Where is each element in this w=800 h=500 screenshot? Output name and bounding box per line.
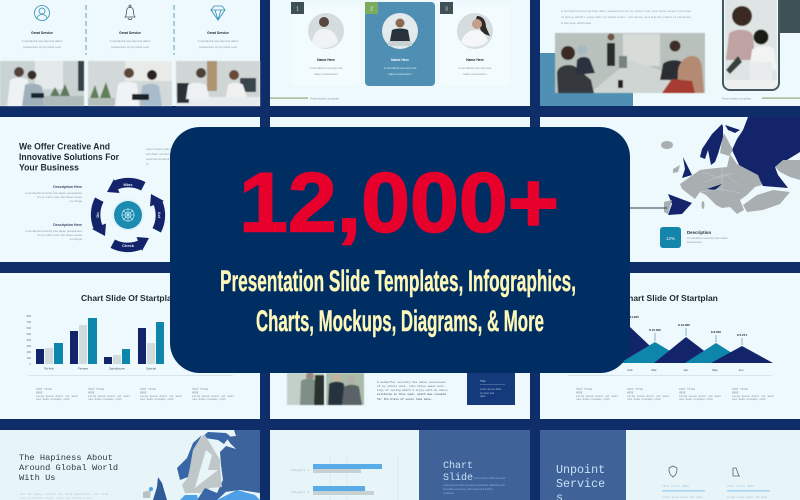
right panel: ut laoreet <box>443 491 454 495</box>
description 1: of my entire soul, like these sweet <box>37 195 82 199</box>
card 1: 1 <box>296 6 299 12</box>
heading: Around Global World <box>19 463 118 473</box>
service column 1 text: A wonderful serenity has taken <box>22 39 63 43</box>
right panel <box>419 430 530 500</box>
card 3: taken possession <box>463 72 487 76</box>
text columns: Lorem ipsum dolor sit amet <box>192 394 234 398</box>
service column 3 text <box>198 31 239 49</box>
service column 2 text: A wonderful serenity has taken <box>110 39 151 43</box>
text columns: HERE <box>192 392 199 394</box>
axis labels <box>27 314 32 366</box>
text columns: TEXT TITLE <box>88 388 105 391</box>
photo: colleagues at desk <box>176 61 260 106</box>
card 1: Name Here <box>317 58 335 62</box>
text columns: HERE <box>627 392 634 394</box>
bar labels: Category 2 <box>291 491 309 494</box>
body text: the countries there live the blind texts <box>20 496 92 500</box>
card 2 highlighted: taken possession <box>388 72 412 76</box>
service item 1 <box>662 485 705 499</box>
slide: partly hidden centre slide <box>270 117 530 137</box>
card 1 <box>291 2 360 86</box>
service column 3 text: possession of my entire soul <box>199 45 237 49</box>
axis labels: 800 <box>27 314 32 318</box>
bars <box>36 318 164 364</box>
heading <box>19 454 118 480</box>
text columns: sed diam nonummy nibh <box>679 397 713 401</box>
description 1: Description Here <box>53 185 82 189</box>
value labels: $ 5.271 <box>737 333 747 337</box>
text columns <box>576 388 774 401</box>
service column 2 text: Great Service <box>119 31 141 35</box>
slide: team photos with text <box>270 372 530 419</box>
heading: With Us <box>19 473 56 483</box>
description 2: mornings <box>70 237 82 241</box>
dark info box <box>467 373 515 405</box>
left panel: Service <box>556 477 605 491</box>
service column 2 text: possession of my entire soul <box>111 45 149 49</box>
card 2 highlighted: Name Here <box>391 58 409 62</box>
dark info box: Title <box>480 379 486 383</box>
intro paragraph: euismod tincidunt <box>146 157 170 161</box>
photo: team meeting <box>555 33 705 93</box>
body text: Far far away, behind the word mountains, far from <box>20 492 108 496</box>
text columns: Lorem ipsum dolor sit amet <box>732 394 774 398</box>
text columns: HERE <box>36 392 43 394</box>
service item 2 <box>727 485 770 499</box>
card 3: A wonderful serenity has <box>459 66 492 70</box>
category labels: Tel Aviv <box>44 366 55 370</box>
icon: shield <box>669 466 677 477</box>
description 1 <box>25 185 82 203</box>
left panel <box>540 430 626 500</box>
text columns: sed diam nonummy nibh <box>88 397 122 401</box>
text columns: TEXT TITLE <box>627 388 644 391</box>
footer note: Presentation template <box>722 96 752 100</box>
slide: mountain chart <box>540 273 800 419</box>
description 1: mornings <box>70 199 82 203</box>
heading: Innovative Solutions For <box>19 152 120 162</box>
slide: three services with photos <box>0 0 260 106</box>
central headline panel <box>170 127 630 373</box>
cycle labels: Check <box>122 243 135 248</box>
service item 2: Lorem ipsum dolor sit amet <box>727 495 768 499</box>
slide: horizontal bar chart <box>270 430 530 500</box>
paragraph: A wonderful serenity has taken possession <box>377 380 446 384</box>
value labels: $ 8.500 <box>711 330 721 334</box>
description 2: Description Here <box>53 223 82 227</box>
month labels: Apr <box>684 368 688 372</box>
slide: services list <box>540 430 800 500</box>
cycle labels: Do <box>95 212 100 218</box>
paragraph <box>377 380 448 401</box>
stat box <box>660 227 681 248</box>
slide: team profile cards <box>270 0 530 106</box>
stat description: A wonderful serenity has taken <box>687 236 728 240</box>
paragraph: for the bliss of souls like mine. <box>377 397 432 401</box>
text columns: TEXT TITLE <box>679 388 696 391</box>
axis labels: 500 <box>27 332 32 336</box>
category labels: Special <box>146 366 156 370</box>
description 2 <box>25 223 82 241</box>
subtitle line 2: Charts, Mockups, Diagrams, & More <box>256 305 544 338</box>
axis labels: 700 <box>27 320 32 324</box>
text columns: HERE <box>732 392 739 394</box>
map shapes <box>143 430 260 500</box>
slide: meeting photo and phone mockup <box>540 0 800 106</box>
month labels <box>627 368 744 372</box>
icon: diamond <box>211 6 225 20</box>
text columns: sed diam nonummy nibh <box>576 397 610 401</box>
card 3: Name Here <box>466 58 484 62</box>
text columns: sed diam nonummy nibh <box>627 397 661 401</box>
stat description: Description <box>687 230 711 235</box>
text columns: Lorem ipsum dolor sit amet <box>627 394 669 398</box>
card 2 highlighted: 2 <box>370 6 373 12</box>
service column 2 text <box>110 31 151 49</box>
text columns: Lorem ipsum dolor sit amet <box>88 394 130 398</box>
card 2 highlighted: A wonderful serenity has <box>384 66 417 70</box>
icon: bell <box>125 5 135 20</box>
phone mockup <box>723 0 779 90</box>
bars <box>313 464 382 495</box>
service column 3 text: Great Service <box>207 31 229 35</box>
headline number: 12,000+ <box>239 156 559 250</box>
card 1: taken possession <box>314 72 338 76</box>
text columns: Lorem ipsum dolor sit amet <box>679 394 721 398</box>
icon: document <box>733 468 740 476</box>
cycle labels <box>95 182 162 248</box>
text columns: TEXT TITLE <box>140 388 157 391</box>
intro paragraph: sed diam nonummy <box>146 152 173 156</box>
photo: business women <box>326 373 364 405</box>
text columns: TEXT TITLE <box>192 388 209 391</box>
dark info box: Lorem ipsum dolor <box>480 387 502 391</box>
text columns: HERE <box>88 392 95 394</box>
value labels <box>627 315 747 337</box>
photo: colleagues with tablet <box>0 61 84 106</box>
axis labels: 0 <box>30 362 32 366</box>
text columns: sed diam nonummy nibh <box>36 397 70 401</box>
icon: person <box>34 6 50 20</box>
text columns: HERE <box>679 392 686 394</box>
cycle labels: Miss <box>124 182 133 187</box>
service column 3 text: A wonderful serenity has taken <box>198 39 239 43</box>
heading: Your Business <box>19 162 79 172</box>
right panel: Slide <box>443 472 473 484</box>
left panel: Unpoint <box>556 463 605 477</box>
axis labels: 600 <box>27 326 32 330</box>
card 1: A wonderful serenity has <box>310 66 343 70</box>
text columns: TEXT TITLE <box>732 388 749 391</box>
icon: network hub <box>121 208 135 222</box>
service item 2: TEXT TITLE HERE <box>727 485 754 488</box>
map of Europe <box>661 117 800 215</box>
description 2: A wonderful serenity has taken possession <box>25 229 82 233</box>
text columns: sed diam nonummy nibh <box>192 397 226 401</box>
service column 1 text: possession of my entire soul <box>23 45 61 49</box>
service item 1: TEXT TITLE HERE <box>662 485 689 488</box>
dark info box: diam <box>480 394 486 398</box>
slide: creative solutions with cycle diagram <box>0 117 260 262</box>
category labels: Ferrara <box>78 366 88 370</box>
intro text: A wonderful serenity has taken possession of my entire soul, like these sweet mornings <box>561 9 692 13</box>
month labels: Feb <box>627 368 633 372</box>
heading: We Offer Creative And <box>19 142 110 152</box>
heading <box>19 142 120 172</box>
chart title: Chart Slide Of Startplan <box>81 293 177 303</box>
text columns: sed diam nonummy nibh <box>140 397 174 401</box>
footer note: Presentation template <box>310 96 340 100</box>
intro text: in this spot, which was <box>561 21 591 25</box>
cycle diagram <box>92 179 164 251</box>
photo: colleagues discussing <box>88 61 172 106</box>
text columns: TEXT TITLE <box>576 388 593 391</box>
stat box: 12% <box>666 236 675 241</box>
card 3 <box>440 2 510 86</box>
text columns: TEXT TITLE <box>36 388 53 391</box>
body text <box>20 493 108 499</box>
description 2: of my entire soul, like these sweet <box>37 233 82 237</box>
slide: global world map <box>0 430 260 500</box>
bar labels <box>291 469 309 494</box>
paragraph: ings of spring which I enjoy with my whole <box>377 388 448 392</box>
right panel: Sed diam nonummy nibh euismod tincidunt <box>443 487 493 491</box>
intro paragraph: Lorem ipsum dolor sit <box>146 147 175 151</box>
text columns: Lorem ipsum dolor sit amet <box>140 394 182 398</box>
intro paragraph: ut <box>146 162 149 166</box>
month labels: May <box>712 368 718 372</box>
month labels: Mar <box>651 368 657 372</box>
value labels: $ 14.200 <box>627 315 639 319</box>
text columns: Lorem ipsum dolor sit amet <box>576 394 618 398</box>
axis labels: 400 <box>27 338 32 342</box>
card 3: 3 <box>445 6 448 12</box>
stat description: possession <box>687 240 702 244</box>
text columns: Lorem ipsum dolor sit amet <box>36 394 78 398</box>
stat description <box>687 230 728 244</box>
intro text <box>561 9 692 25</box>
category labels: Spindlytown <box>109 366 125 370</box>
month labels: Jun <box>739 368 744 372</box>
photo: two men <box>287 372 324 405</box>
bar labels: Category 1 <box>291 469 309 472</box>
service item 1: Lorem ipsum dolor sit amet <box>662 495 703 499</box>
mountains <box>590 327 773 363</box>
right panel: Chart <box>443 460 473 472</box>
text columns: HERE <box>576 392 583 394</box>
chart title: Chart Slide Of Startplan <box>622 293 718 303</box>
right panel: Lorem ipsum dolor sit amet consectetur adipiscing elit <box>443 483 505 487</box>
value labels: $ 13.000 <box>678 323 690 327</box>
service column 1 text: Great Service <box>31 31 53 35</box>
axis labels: 100 <box>27 356 32 360</box>
paragraph: existence in this spot, which was created <box>377 392 446 396</box>
service column 1 text <box>22 31 63 49</box>
category labels <box>44 366 156 370</box>
axis labels: 200 <box>27 350 32 354</box>
text columns <box>36 388 234 401</box>
right panel: Lorem ipsum dolor sit amet <box>474 476 506 480</box>
intro text: of spring which I enjoy with my whole heart. I am alone, and feel the charm of existence <box>561 15 691 19</box>
axis labels: 300 <box>27 344 32 348</box>
description 1: A wonderful serenity has taken possession <box>25 191 82 195</box>
slide: Europe map <box>540 117 800 262</box>
cycle labels: Act <box>157 212 162 219</box>
dark info box: sit amet sed <box>480 391 495 395</box>
value labels: $ 10.000 <box>649 328 661 332</box>
paragraph: of my entire soul, like these sweet morn- <box>377 384 446 388</box>
intro paragraph <box>146 147 175 166</box>
heading: The Hapiness About <box>19 453 113 463</box>
slide: bar chart <box>0 273 260 419</box>
text columns: HERE <box>140 392 147 394</box>
text columns: sed diam nonummy nibh <box>732 397 766 401</box>
card 2 highlighted <box>365 2 435 86</box>
